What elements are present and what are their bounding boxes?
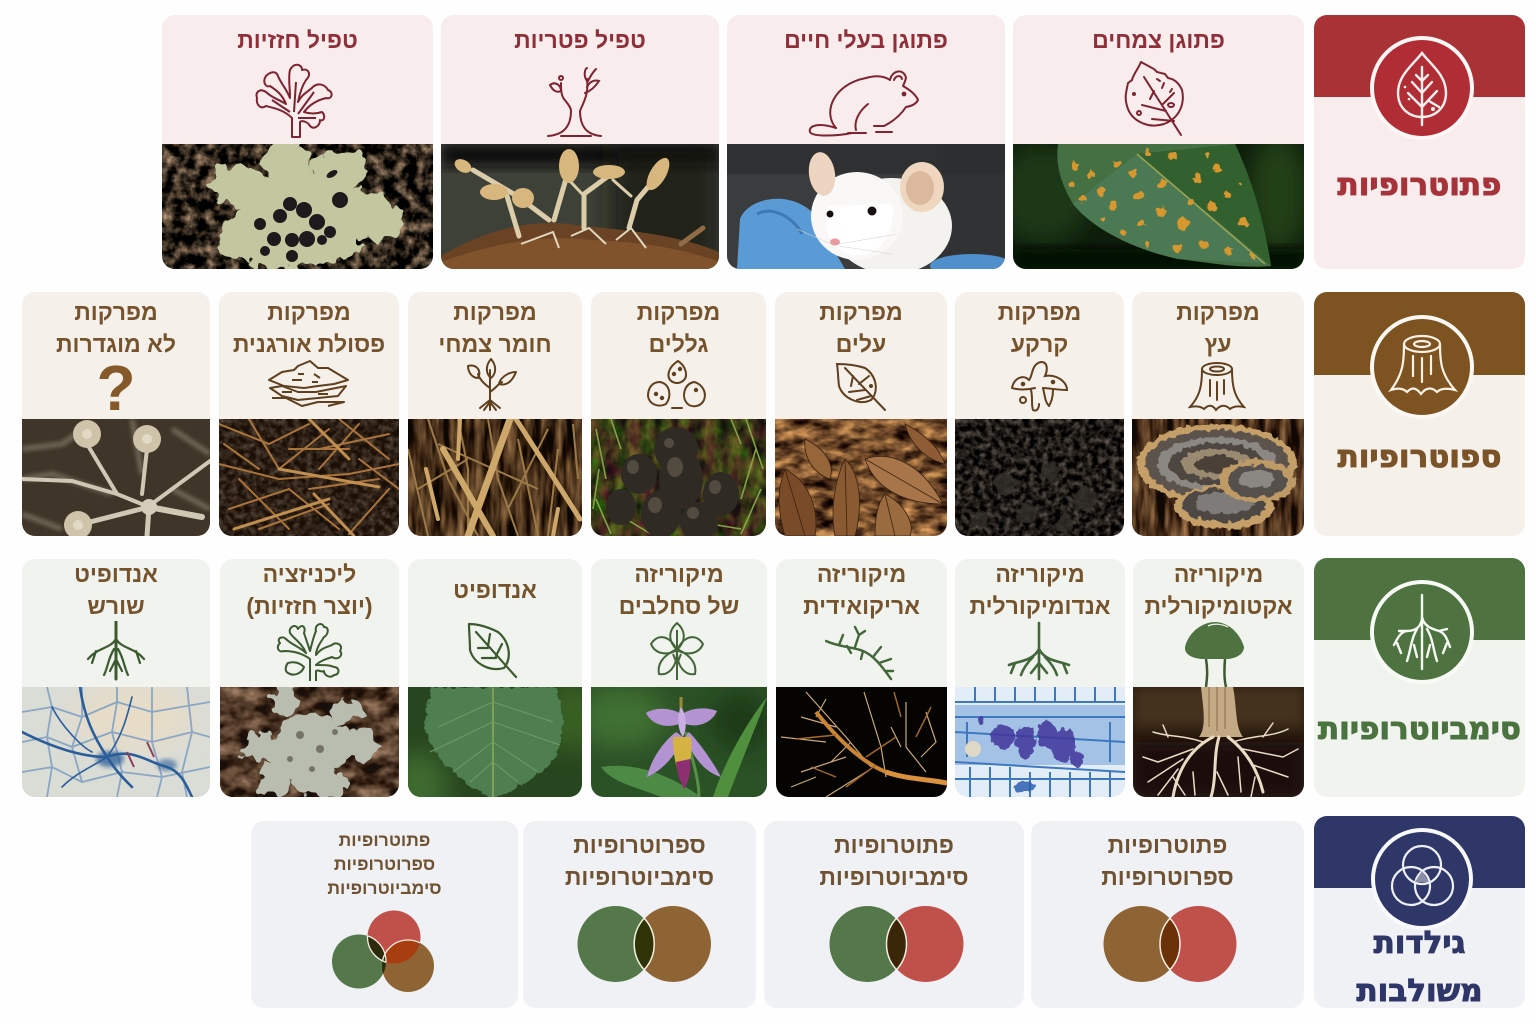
- heading: גללים: [649, 331, 708, 357]
- photo: green leaf: [408, 687, 582, 797]
- card: root endophyte: [22, 559, 210, 797]
- icon: dung pellets: [647, 360, 706, 409]
- icon: root: [86, 621, 146, 681]
- heading: מפרקות: [267, 299, 351, 325]
- photo: rust spots on leaf: [1013, 144, 1304, 269]
- icon: sprout: [467, 358, 517, 411]
- heading: מפרקות: [74, 299, 158, 325]
- heading: פתוטרופיות: [339, 830, 430, 850]
- icon: orchid flower: [649, 622, 705, 682]
- panel: pathotrophs category: [1314, 15, 1525, 269]
- card: saprotroph + symbiotroph: [523, 821, 756, 1008]
- heading: [220, 558, 399, 622]
- photo: purple orchid: [591, 687, 767, 797]
- category title: סימביוטרופיות: [1318, 711, 1521, 747]
- heading: מפרקות: [453, 299, 537, 325]
- heading: אקטומיקורלית: [1144, 593, 1293, 619]
- icon: waste pile: [268, 360, 349, 407]
- photo: dung pellets on grass: [591, 419, 766, 536]
- heading: אנדומיקורלית: [970, 593, 1110, 619]
- heading: לא מוגדרות: [56, 331, 176, 357]
- heading: ליכניזציה: [263, 561, 356, 587]
- card: pathotroph + symbiotroph: [764, 821, 1024, 1008]
- heading: מפרקות: [998, 299, 1081, 325]
- card: undefined decomposers: [22, 292, 210, 536]
- icon: roots badge: [1370, 580, 1474, 680]
- heading: סימביוטרופיות: [819, 864, 969, 890]
- icon: fine branching root: [825, 626, 894, 680]
- heading: [233, 299, 385, 357]
- heading: ספרוטרופיות: [334, 854, 435, 874]
- photo: tangled organic debris: [219, 419, 399, 536]
- heading: עץ: [1205, 331, 1231, 357]
- heading: [1176, 299, 1260, 357]
- icon: root system: [1008, 622, 1070, 680]
- photo: turkey tail bracket fungus: [1132, 419, 1304, 536]
- card: lichen parasite: [162, 15, 433, 269]
- card: ericoid mycorrhiza: [776, 559, 947, 797]
- heading: פתוגן בעלי חיים: [784, 27, 948, 53]
- heading: מפרקות: [637, 299, 720, 325]
- card: fungal parasite: [441, 15, 719, 269]
- heading: חומר צמחי: [438, 331, 552, 357]
- icon: tree stump badge: [1370, 315, 1474, 415]
- heading: מיקוריזה: [817, 561, 906, 587]
- icon: mushroom over roots: [1184, 622, 1244, 687]
- heading: [637, 299, 720, 357]
- heading: שורש: [87, 593, 145, 619]
- card: plant matter decomposers: [408, 292, 582, 536]
- photo: fungal parasite stalks: [441, 144, 719, 269]
- card: ectomycorrhiza: [1133, 559, 1304, 797]
- category title: [1314, 919, 1525, 1015]
- heading: מיקוריזה: [1174, 561, 1263, 587]
- card: endophyte: [408, 559, 582, 797]
- category title: פתוטרופיות: [1338, 167, 1501, 203]
- heading: סימביוטרופיות: [327, 878, 442, 898]
- category header band: [1314, 816, 1525, 888]
- heading: מפרקות: [819, 299, 903, 325]
- heading: אנדופיט: [74, 561, 158, 587]
- heading: פסולת אורגנית: [233, 331, 385, 357]
- photo: dark soil: [955, 419, 1124, 536]
- heading: ספרוטרופיות: [573, 832, 706, 858]
- card: organic waste decomposers: [219, 292, 399, 536]
- heading: קרקע: [1011, 331, 1068, 357]
- icon: three rings badge: [1367, 824, 1477, 934]
- venn diagram: [764, 821, 1024, 1008]
- card: plant pathogen: [1013, 15, 1304, 269]
- photo: brown leaf litter: [775, 419, 947, 536]
- card: all three guilds: [251, 821, 518, 1008]
- category title: משולבות: [1356, 973, 1483, 1008]
- heading: [251, 828, 518, 900]
- heading: עלים: [836, 331, 886, 357]
- venn diagram: [523, 821, 756, 1008]
- card: dung decomposers: [591, 292, 766, 536]
- icon: diseased leaf badge: [1370, 36, 1474, 140]
- icon: branching parasite: [547, 67, 602, 137]
- category title: גילדות: [1374, 925, 1465, 961]
- panel: symbiotrophs category: [1314, 558, 1525, 797]
- heading: [970, 561, 1110, 619]
- heading: [803, 561, 920, 619]
- heading: מיקוריזה: [634, 561, 724, 587]
- heading: [591, 558, 767, 622]
- venn diagram: [1031, 821, 1304, 1008]
- icon: lichen: [274, 621, 346, 683]
- icon: lichen tree: [256, 64, 333, 138]
- heading: [1144, 561, 1293, 619]
- card: soil decomposers: [955, 292, 1124, 536]
- heading: (יוצר חזזיות): [246, 593, 373, 619]
- heading: [764, 829, 1024, 893]
- card: lichenization: [220, 559, 399, 797]
- heading: מיקוריזה: [995, 561, 1085, 587]
- card: endomycorrhiza: [955, 559, 1125, 797]
- heading: [438, 299, 552, 357]
- heading: [998, 299, 1081, 357]
- heading: טפיל חזזיות: [237, 27, 358, 53]
- heading: [1031, 829, 1304, 893]
- card: pathotroph + saprotroph: [1031, 821, 1304, 1008]
- card: animal pathogen: [727, 15, 1005, 269]
- panel: saprotrophs category: [1314, 292, 1525, 536]
- panel: mixed guilds category: [1314, 816, 1525, 1008]
- category header band: [1314, 558, 1525, 640]
- category title: ספוטרופיות: [1338, 439, 1501, 475]
- heading: [819, 299, 903, 357]
- heading: פתוטרופיות: [1108, 832, 1227, 858]
- icon: soil mushrooms: [1011, 361, 1068, 412]
- heading: טפיל פטריות: [514, 27, 646, 53]
- heading: אנדופיט: [453, 577, 537, 603]
- card: wood decomposers: [1132, 292, 1304, 536]
- icon: leaf: [466, 622, 520, 680]
- icon: tree stump: [1188, 362, 1246, 412]
- photo: dried straw: [408, 419, 582, 536]
- card: orchid mycorrhiza: [591, 559, 767, 797]
- photo: stained root cells with arbuscules: [955, 687, 1125, 797]
- photo: mushroom with roots: [1133, 687, 1304, 797]
- venn diagram: [332, 910, 434, 992]
- category header band: [1314, 292, 1525, 375]
- heading: פתוטרופיות: [834, 832, 954, 858]
- heading: של סחלבים: [619, 593, 739, 619]
- heading: [523, 829, 756, 893]
- photo: lichen on bark: [162, 144, 433, 269]
- heading: [22, 558, 210, 622]
- photo: stained root cells: [22, 687, 210, 797]
- icon: mouse: [808, 70, 919, 136]
- photo: white lab mouse on blue glove: [727, 144, 1005, 269]
- heading: ספרוטרופיות: [1101, 864, 1234, 890]
- icon: spotted leaf: [1124, 61, 1184, 136]
- card: leaf decomposers: [775, 292, 947, 536]
- photo: grey lichen on bark: [220, 687, 399, 797]
- category header band: [1314, 15, 1525, 97]
- heading: מפרקות: [1176, 299, 1260, 325]
- photo: ericoid roots on black: [776, 687, 947, 797]
- photo: hyphae with spore heads: [22, 419, 210, 536]
- heading: [56, 299, 176, 357]
- heading: אריקואידית: [803, 593, 920, 619]
- heading: סימביוטרופיות: [565, 864, 714, 890]
- heading: פתוגן צמחים: [1092, 27, 1225, 53]
- icon: decomposing leaf: [836, 363, 886, 411]
